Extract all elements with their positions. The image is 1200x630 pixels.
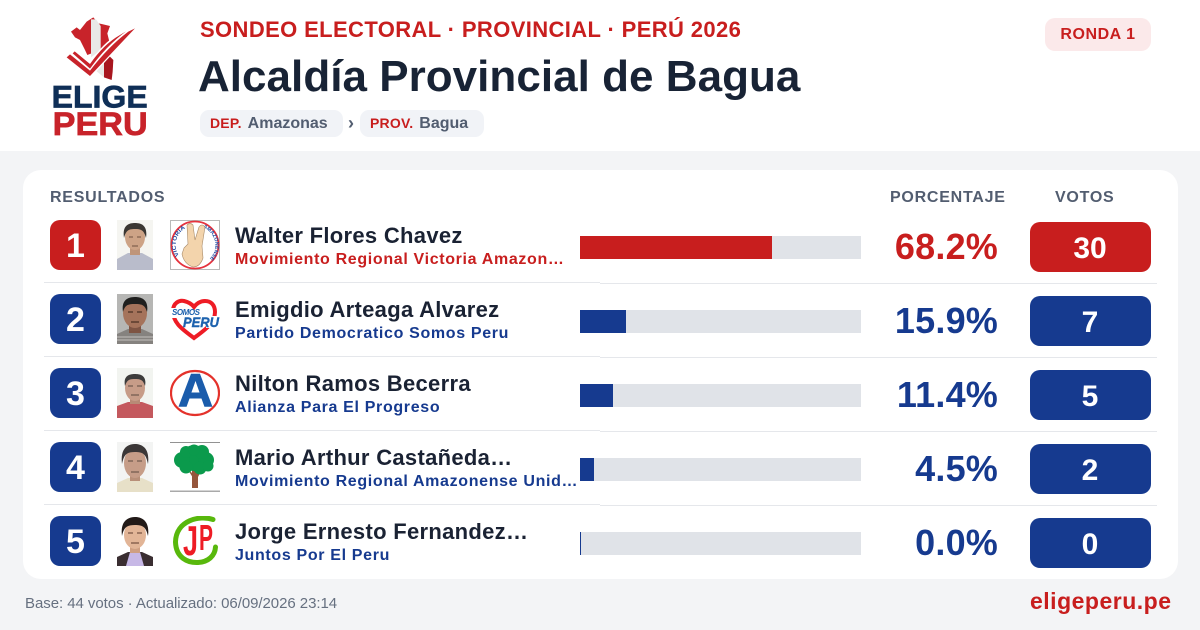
round badge [1045,18,1151,51]
photo: candidate 1 [117,220,153,270]
chip: provincia: PROV. Bagua [370,115,468,132]
vote share bar [580,384,861,407]
percentage: 0.0% [915,522,998,563]
votes: 2 [1082,454,1098,487]
logo: Elige Peru: PERU [53,105,148,142]
party logo: Somos Peru: SOMOS [172,308,201,317]
breadcrumb arrow: › [348,113,354,133]
votes [1030,370,1151,420]
chip: departamento [200,110,343,137]
party name: Juntos Por El Peru [235,547,390,564]
chip: departamento: DEP. Amazonas [210,115,328,132]
party name: Movimiento Regional Amazonense Unid… [235,473,578,490]
vote share bar [580,310,861,333]
round badge: RONDA 1 [1060,26,1136,43]
rank 5 [50,516,101,566]
party name: Movimiento Regional Victoria Amazon… [235,251,565,268]
row 3: Nilton Ramos Becerra [50,368,1151,420]
votes [1030,222,1151,272]
photo: candidate 2 [117,294,153,344]
votes [1030,296,1151,346]
candidate name: Emigdio Arteaga Alvarez [235,297,499,322]
party logo: Victoria Amazonense: AMAZONENSE [204,224,219,261]
party name: Alianza Para El Progreso [235,399,440,416]
row 5: Jorge Ernesto Fernandez [50,516,1151,568]
party logo: Juntos por el Peru [173,516,218,565]
rank 2 [50,294,101,344]
rank 1: 1 [66,227,85,265]
header band [0,0,1200,151]
percentage: 68.2% [895,226,998,267]
rank 4 [50,442,101,492]
votes: 30 [1073,232,1107,265]
rank 3 [50,368,101,418]
percentage: 15.9% [895,300,998,341]
column heading: votos: VOTOS [1055,189,1114,206]
row 1: Walter Flores Chavez [50,220,1151,272]
rank 1 [50,220,101,270]
photo: candidate 5 [117,517,153,566]
logo: Elige Peru: ELIGE [52,79,148,114]
rank 5: 5 [66,523,85,561]
vote share bar [580,458,861,481]
row 4: Mario Arthur Castañeda [50,442,1151,494]
candidate name: Mario Arthur Castañeda… [235,445,512,470]
title: Alcaldía Provincial de Bagua [198,52,800,101]
chip: provincia [360,110,484,137]
row 2: Emigdio Arteaga Alvarez [50,294,1151,346]
votes [1030,518,1151,568]
party logo: Victoria Amazonense: VICTORIA [172,226,185,258]
percentage: 11.4% [897,374,998,415]
candidate name: Nilton Ramos Becerra [235,371,471,396]
photo: candidate 3 [117,368,153,418]
column heading: resultados: RESULTADOS [50,189,165,206]
percentage: 4.5% [915,448,998,489]
rank 4: 4 [66,449,85,487]
votes: 7 [1082,306,1098,339]
vote share bar [580,532,861,555]
rank 3: 3 [66,375,85,413]
votes: 5 [1082,380,1098,413]
candidate name: Jorge Ernesto Fernandez… [235,519,528,544]
party logo: Juntos por el Peru: J [183,517,198,564]
party logo: tree [170,442,220,492]
party name: Partido Democratico Somos Peru [235,325,509,342]
logo: Elige Peru [52,17,148,142]
votes: 0 [1082,528,1098,561]
footer note: Base: 44 votos · Actualizado: 06/09/2026 23:14 [25,595,337,612]
candidate name: Walter Flores Chavez [235,223,463,248]
panel: results card [23,170,1178,579]
rank 2: 2 [66,301,85,339]
column heading: porcentaje: PORCENTAJE [890,189,1006,206]
party logo: Somos Peru [171,298,220,340]
photo: candidate 4 [117,442,153,492]
party logo: Victoria Amazonense [170,220,220,270]
party logo: Alianza Para el Progreso [170,368,220,416]
eyebrow heading: SONDEO ELECTORAL · PROVINCIAL · PERÚ 2026 [200,17,741,42]
votes [1030,444,1151,494]
vote share bar [580,236,861,259]
footer brand: eligeperu.pe [1030,588,1171,614]
